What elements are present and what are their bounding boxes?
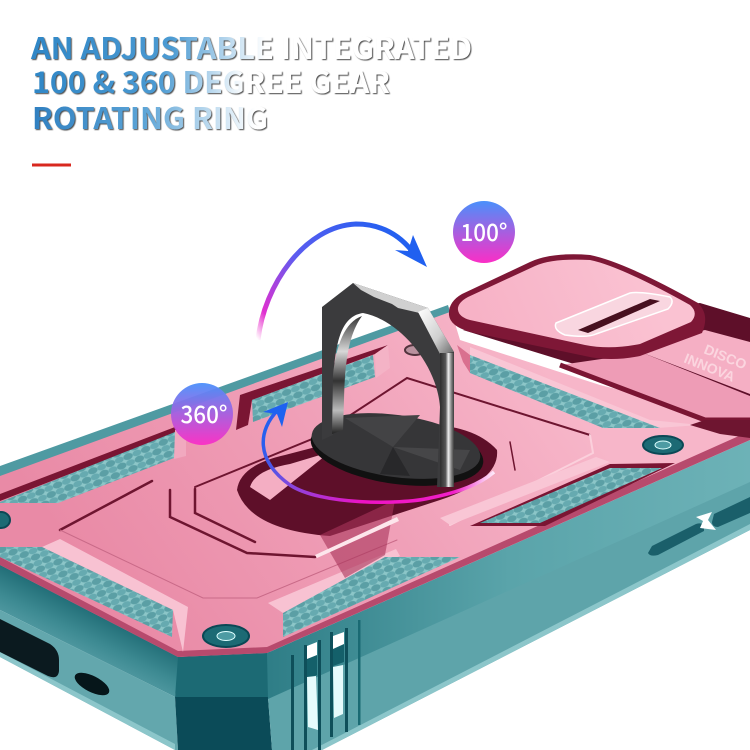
top teal rim xyxy=(0,305,450,476)
title: AN ADJUSTABLE INTEGRATED xyxy=(30,24,472,68)
case side: bottom-left lower band xyxy=(0,610,178,750)
charging port xyxy=(0,619,59,677)
title xyxy=(30,24,472,138)
side buttons xyxy=(648,497,750,556)
case side: corner xyxy=(175,650,272,750)
screw holes xyxy=(0,345,683,647)
pink case face xyxy=(0,307,750,657)
engraved brand text: INNOVA xyxy=(682,350,737,385)
engraved brand text xyxy=(682,341,749,385)
module bottom shadow xyxy=(690,420,750,438)
case side: bottom-left upper band xyxy=(0,563,180,697)
corner vents xyxy=(291,620,360,750)
slider top xyxy=(458,260,695,347)
slider outer xyxy=(449,254,705,359)
pink lower edge xyxy=(0,431,750,657)
case side: right lower band xyxy=(268,480,750,750)
ring disc xyxy=(306,403,488,496)
microphone hole xyxy=(71,668,113,700)
100 degree arrow xyxy=(258,224,427,340)
red accent line xyxy=(32,164,71,166)
screw centres xyxy=(217,441,671,640)
centre panel grooves xyxy=(60,378,593,598)
title: ROTATING RING xyxy=(32,94,268,138)
360 degree badge: 360° xyxy=(180,395,228,430)
phone case xyxy=(0,201,750,750)
metal ring arch xyxy=(322,283,454,487)
100 degree badge xyxy=(453,201,515,263)
module base xyxy=(463,303,750,422)
ring socket xyxy=(237,424,497,578)
honeycomb grip strips xyxy=(0,355,662,637)
360 degree arrow xyxy=(263,402,494,502)
camera slider module xyxy=(449,254,750,438)
side bottom light edge xyxy=(0,652,175,750)
engraved brand text: DISCO xyxy=(702,341,749,372)
module rail top xyxy=(640,330,750,394)
case side: right upper band xyxy=(267,440,750,699)
title: 100 & 360 DEGREE GEAR xyxy=(32,58,390,102)
slider grip xyxy=(555,292,672,336)
light bevel panels xyxy=(0,345,700,652)
module rail side xyxy=(560,353,750,420)
100 degree badge: 100° xyxy=(460,213,508,248)
side lower light edge xyxy=(312,524,750,750)
360 degree badge xyxy=(171,383,233,445)
